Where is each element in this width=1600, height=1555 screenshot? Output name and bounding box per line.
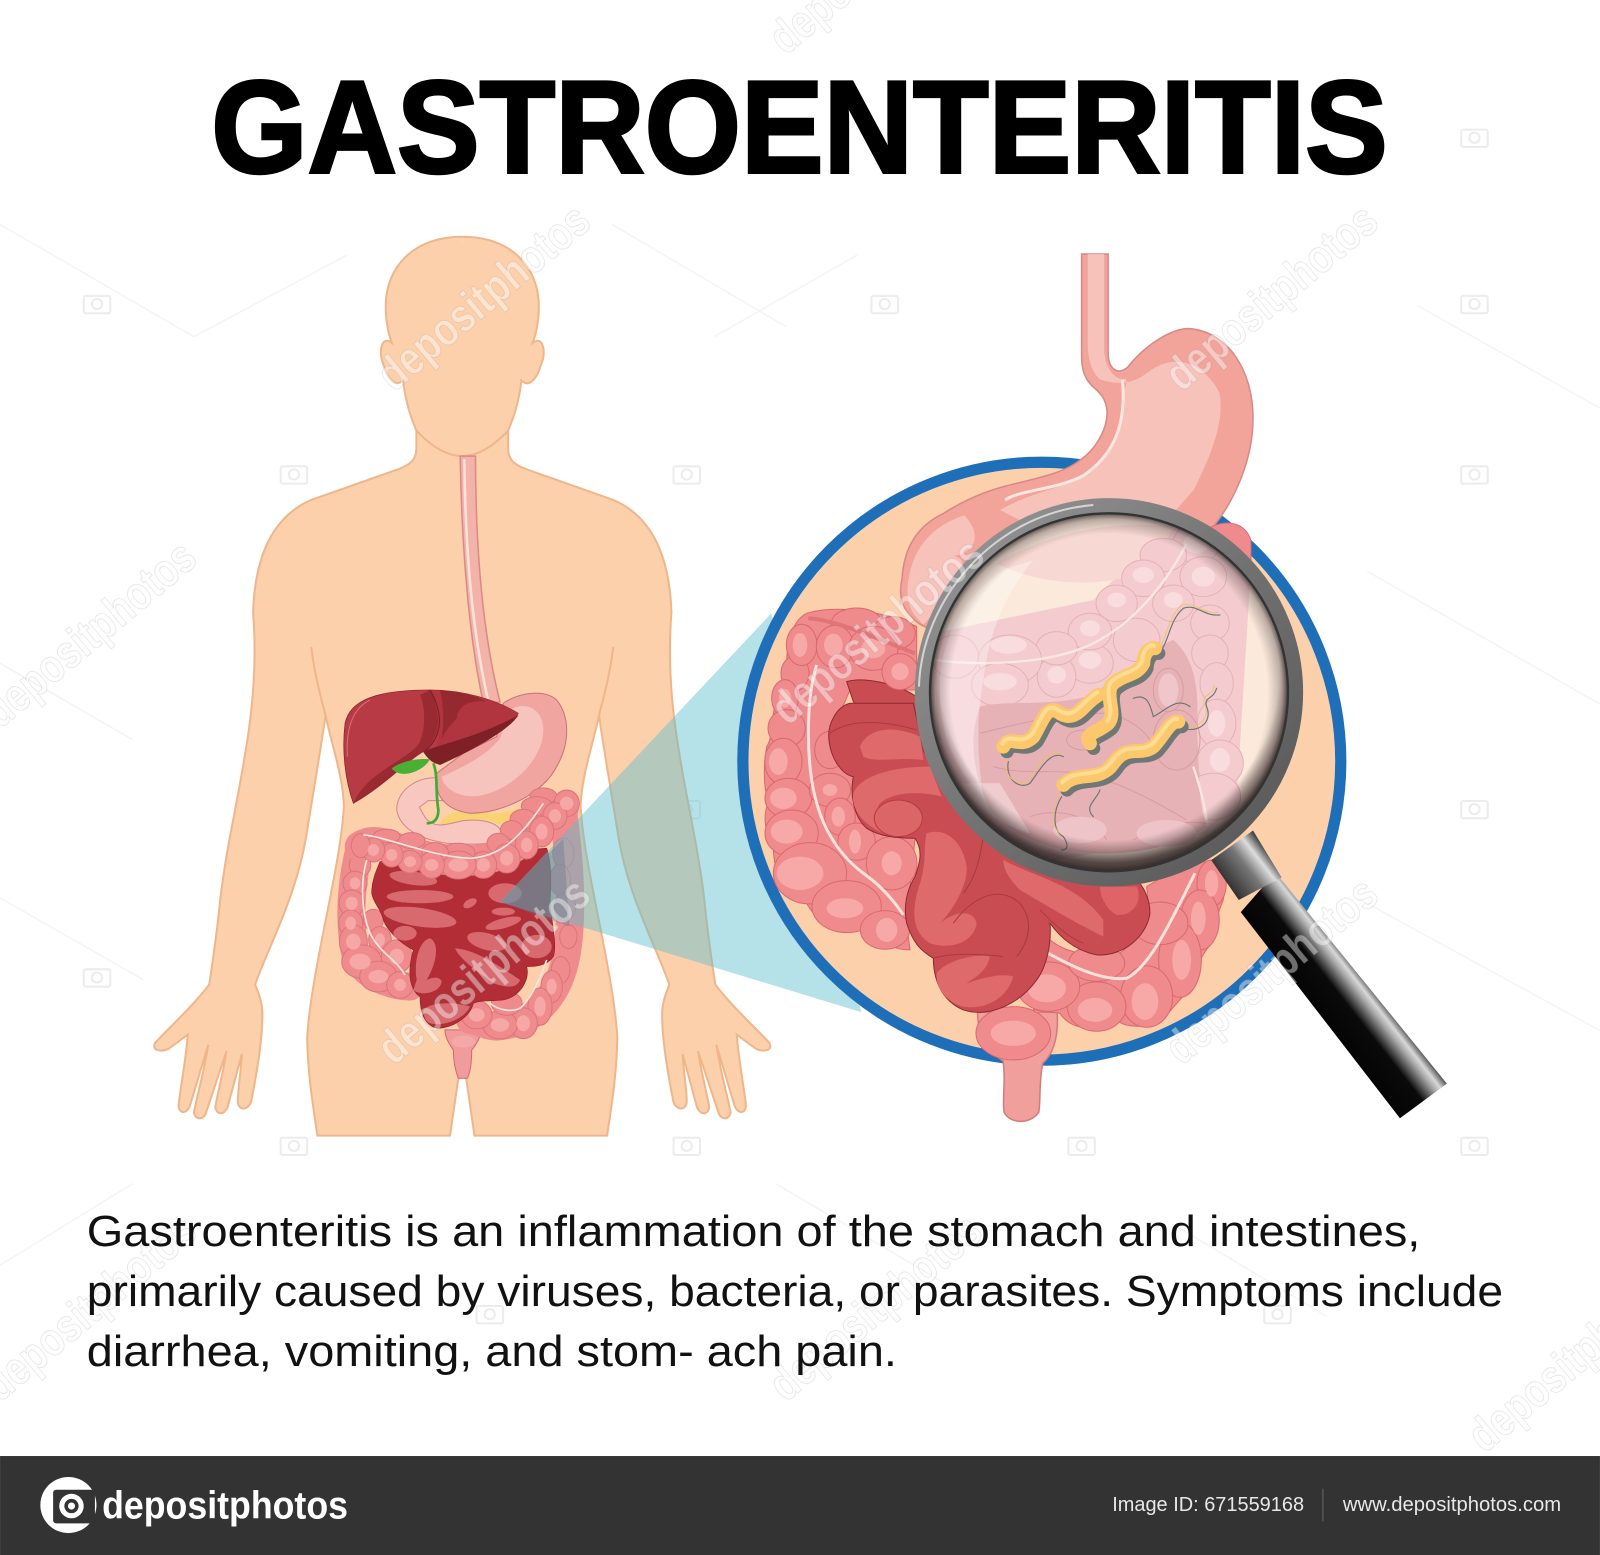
image watermarks: depositphotos (367, 867, 600, 1074)
enlarged colon underlay (764, 609, 1224, 1028)
duodenum (397, 778, 503, 844)
colon underlay (351, 813, 570, 1027)
transverse colon underlay (360, 808, 563, 861)
lens assembly (919, 500, 1300, 887)
description text: diarrhea, vomiting, and stom- ach pain. (87, 1327, 897, 1376)
bacteria flagella (1006, 604, 1220, 850)
lens vignette (931, 514, 1287, 870)
pancreas (440, 805, 523, 827)
enlarged stomach and duodenum (901, 254, 1253, 653)
handle collar (1211, 831, 1282, 900)
enlarged colon stripes (808, 665, 1195, 979)
magnifying glass (919, 500, 1447, 1118)
liver (344, 690, 518, 803)
enlarged upper colon lobes (786, 608, 918, 690)
enlarged bowel (764, 608, 1226, 1060)
stomach highlight (442, 706, 543, 796)
title: GASTROENTERITIS (211, 53, 1388, 200)
footer brand name: depositphotos (102, 1484, 348, 1527)
small intestine in lens (973, 640, 1207, 853)
zoomed circle (743, 462, 1341, 1060)
human body silhouette (154, 237, 770, 1136)
colon highlights (345, 877, 557, 1048)
description text (87, 1207, 1503, 1376)
small intestine (372, 848, 555, 1028)
upper colon stripe (808, 618, 915, 653)
footer image id: Image ID: 671559168 (1112, 1494, 1304, 1516)
enlarged colon highlights (769, 689, 1218, 1046)
description text: primarily caused by viruses, bacteria, or parasites. Symptoms include (87, 1267, 1503, 1316)
rectum (445, 1030, 482, 1078)
lens glare (940, 560, 1033, 797)
blue zoom cone (500, 613, 861, 1012)
glass handle (1241, 872, 1447, 1118)
stomach (436, 693, 567, 813)
footer band (0, 1456, 1600, 1555)
small organs inside the body (339, 690, 579, 1078)
bacteria bodies (1003, 648, 1178, 785)
lens lobe highlights (983, 533, 1230, 772)
enlarged rectum (978, 1012, 1057, 1121)
bacteria sheen (1002, 645, 1177, 782)
bile duct (427, 763, 438, 823)
enlarged small intestine (829, 680, 1150, 1012)
esophagus (460, 456, 500, 704)
description text: Gastroenteritis is an inflammation of the stomach and intestines, (87, 1207, 1420, 1256)
colon stripes (363, 803, 547, 1010)
footer logo icon (40, 1477, 96, 1533)
ascending and descending colon (339, 838, 577, 1039)
enlarged colon lobes (765, 656, 1226, 1060)
image watermarks: depositphotos (1155, 867, 1387, 1074)
lens ring (922, 506, 1296, 879)
background watermark icons (0, 130, 1600, 1323)
transverse colon (351, 788, 579, 879)
colon lobe behind lens (1204, 523, 1251, 563)
enlarged upper colon highlights (793, 633, 909, 680)
bacteria shadow (1007, 653, 1182, 790)
footer website: www.depositphotos.com (1342, 1494, 1561, 1516)
image watermarks: depositphotos (759, 1204, 991, 1411)
transverse lobes in lens (932, 523, 1243, 820)
gallbladder (392, 759, 430, 774)
image watermarks: depositphotos (761, 527, 993, 734)
image watermarks: depositphotos (367, 193, 600, 400)
lens interior (931, 514, 1287, 870)
image watermarks: depositphotos (1155, 193, 1387, 400)
transverse colon highlights (368, 797, 573, 872)
lens stripes (933, 543, 1207, 820)
